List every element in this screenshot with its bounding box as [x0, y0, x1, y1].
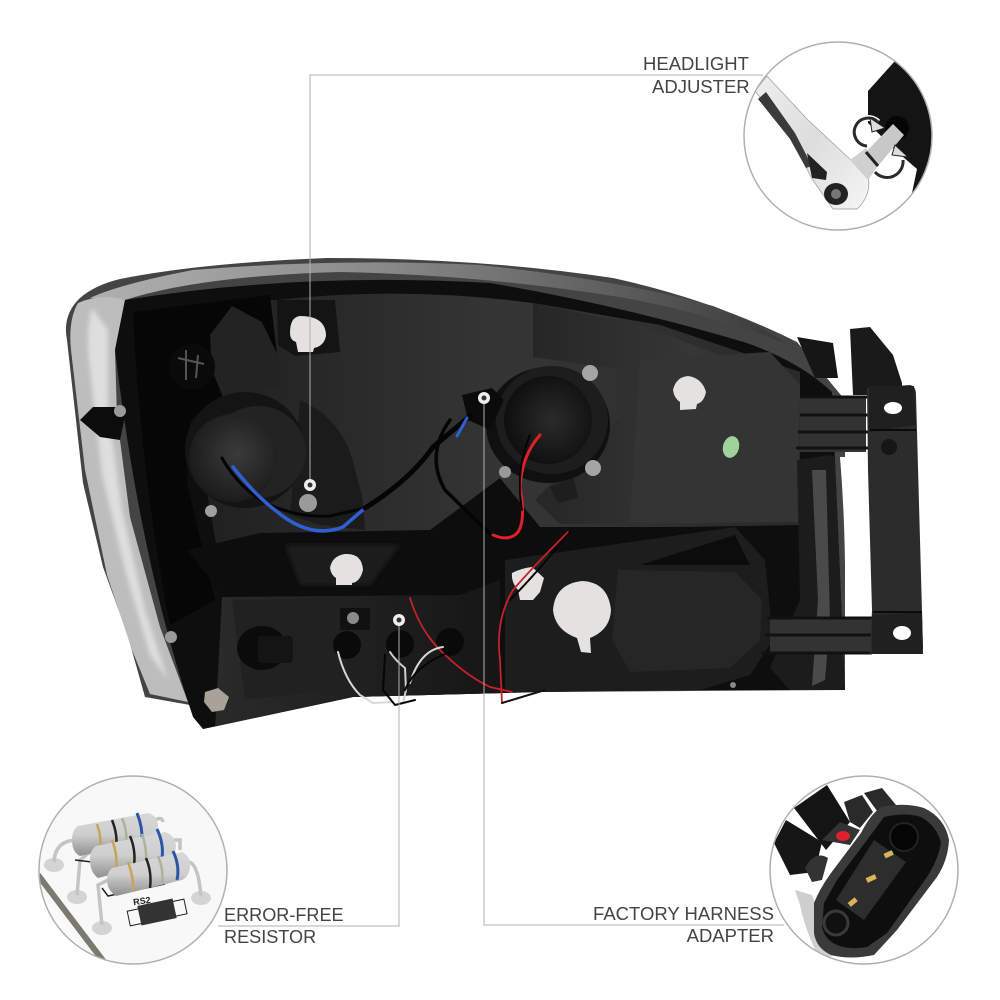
ribs	[770, 397, 872, 653]
label: factory harness adapter: FACTORY HARNESS	[593, 903, 774, 924]
ratchet handle	[755, 76, 869, 209]
resistor marking: RS2	[133, 895, 151, 907]
inset: headlight adjuster	[744, 42, 940, 230]
housing panels	[133, 294, 845, 730]
bracket top tabs	[850, 327, 902, 395]
label: headlight adjuster: HEADLIGHT	[643, 53, 749, 74]
lower right tank	[505, 527, 773, 692]
lens silhouette	[66, 258, 845, 729]
right lens side strip	[770, 455, 845, 690]
dark lower band	[216, 478, 673, 597]
black bracket	[868, 62, 932, 192]
lower sockets	[237, 608, 464, 670]
board edge braid	[38, 875, 104, 962]
label: error-free resistor: ERROR-FREE	[224, 905, 344, 925]
inset: error-free resistor	[30, 776, 227, 965]
round retainer	[169, 344, 215, 390]
top lens band	[90, 262, 812, 362]
screws	[80, 365, 736, 712]
callout line: factory harness adapter	[478, 392, 784, 925]
white plugs	[290, 316, 706, 653]
connector shell	[814, 805, 949, 958]
leads	[54, 818, 201, 925]
right panel	[533, 303, 694, 524]
pads	[44, 858, 211, 935]
chrome edge strip	[70, 297, 188, 702]
pin plate	[836, 840, 906, 920]
label: error-free resistor: RESISTOR	[224, 927, 316, 947]
lower left box	[215, 580, 500, 730]
wires	[222, 416, 570, 705]
pins	[848, 850, 894, 907]
plug bay top left	[277, 300, 340, 356]
cables	[794, 785, 850, 850]
green sticker	[720, 434, 742, 460]
moulded bulge	[210, 306, 280, 402]
left bulb socket	[169, 344, 365, 530]
right bulb socket	[462, 366, 610, 503]
socket and bolt	[850, 148, 878, 180]
callout line: error-free resistor	[218, 614, 405, 926]
mounting bracket	[762, 327, 923, 654]
black frame	[115, 280, 845, 729]
resistors	[72, 813, 190, 896]
silver bracket	[795, 890, 835, 960]
side plate	[867, 385, 923, 654]
mounting holes	[884, 402, 902, 414]
headlight assembly	[66, 258, 923, 730]
window cut-out	[840, 457, 868, 610]
socket holes	[890, 823, 918, 851]
housing tabs	[844, 795, 873, 828]
left recess	[133, 295, 280, 625]
chip	[126, 898, 188, 926]
label: headlight adjuster: ADJUSTER	[652, 76, 750, 97]
rotation arrows	[865, 115, 880, 149]
label: factory harness adapter: ADAPTER	[687, 925, 774, 946]
callout line: headlight adjuster	[304, 75, 763, 491]
main upper body	[208, 294, 800, 543]
inset: factory harness adapter	[770, 776, 958, 964]
